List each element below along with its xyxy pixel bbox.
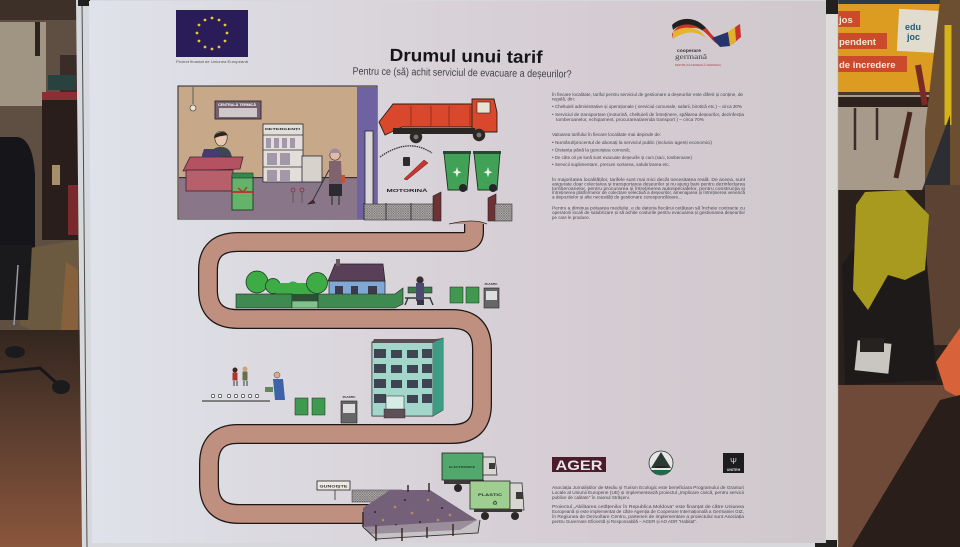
logo: triangle emblem [649,451,673,475]
icon: green truck electronics: ELECTRONICE [449,465,475,469]
background: right side of room: de incredere [839,60,896,71]
shelf with detergents: DETERGENȚI [265,127,300,131]
text block: conclusion: În majoritatea localităților, tarifele sunt mai mici decât necesitatea reală. De aceea, sunt [551,177,746,182]
text block: project credits: Proiectul „Abilitarea cetățenilor în Republica Moldova” este finanțat de către Uniunea [552,504,745,509]
text block: conclusion: asigurate doar colectarea și transportarea deșeurilor și nu ajung bani pentru dezinfectarea [552,182,746,186]
fence and gate [364,192,512,224]
text block: tariff value: Valoarea tarifului în fiecare localitate mai depinde de: [552,132,661,137]
icon: small bins with plastic container [450,282,499,308]
text block: tariff value: • De câte ori pe lună sunt evacuate deșeurile și cum (saci, tomberoane) [552,155,693,160]
icon: EU flag [176,10,248,64]
subtitle: Pentru ce (să) achit serviciul de evacuare a deșeurilor? [352,65,572,81]
text block: conclusion: Pentru a diminua poluarea mediului, e de datoria fiecărui cetățean să încheie contracte cu [552,206,746,210]
text block: conclusion: întreținerea platformelor de colectare selectivă a deșeurilor, amenajarea și întreținerea venerică [551,190,746,195]
text block: tariff value: • Numărul/procentul de abonați la serviciul public (inclusiv agenți economici) [552,140,713,145]
text block: conclusion: operatorii locali de salubrizare și să achite costurile pentru evacuarea și gestionarea deșeurilor [552,210,746,215]
flowers [291,188,304,203]
background: right side of room: joc [906,32,920,42]
illustration: office scene [178,86,377,219]
icon: fuel gauge: MOTORINĂ [386,187,429,193]
whiteboard frame [76,0,838,547]
logo: cooperare germana: REPUBLICA FEDERALĂ GERMANIA [675,63,721,67]
icon: green truck electronics [442,453,497,492]
logo: dark emblem: UNITEH [727,468,741,472]
illustration: apartment block [372,338,443,418]
icon: EU flag: Proiect finanțat de Uniunea Europeană [176,60,248,64]
background: right side of room: pendent [839,37,877,48]
sign: village name: GUNOIȘTE [320,484,348,488]
text block: project credits: pentru Guvernare Eficientă și Responsabilă – AGER și AO ADR “Habitat”. [552,519,697,524]
desk with clerk [183,131,243,191]
illustration: garbage truck [379,99,497,143]
text block: tariff composition: tomberoanelor, echipament, procurarea/arenda transport ) – circa 70% [556,117,704,122]
text block: conclusion: tomberoanelor, pentru procurarea și întreținerea autospecialelor, pentru construcția și [552,186,745,191]
icon: fuel gauge [380,146,432,193]
text block: project credits: Asociația Jurnaliștilor de Mediu și Turism Ecologic este beneficiara Programului de Granturi [552,485,744,490]
logo: cooperare germana [672,19,741,67]
text block: conclusion: pe care le produce. [552,215,590,220]
title: Drumul unui tarif [389,45,543,67]
shelf with detergents [263,124,303,182]
logo: dark emblem [723,453,744,473]
icon: light green truck plastic: ♻ [492,500,498,507]
text block: tariff composition: • Serviciul de transportare (motorină, cheltuieli de întreținere, spălarea deșeurilor, dezinfecția [552,112,745,117]
text block: tariff composition: regulă, din: [552,96,575,102]
logo: triangle emblem: HABITAT [655,465,667,469]
icon: light green truck plastic: PLASTIC [478,493,503,497]
icon: green gift bin [231,173,254,210]
icon: green bins [443,151,501,192]
background: right side of room: jos [838,15,853,26]
person on bench [405,276,433,305]
air conditioner: CENTRALĂ TERMICĂ [218,102,257,107]
text block: project credits: în Regiunea de Dezvoltare Centru, parteneri de implementare a proiectului sunt Asociația [551,514,745,519]
people gardening [202,366,285,401]
background: right side of room: edu [905,22,921,32]
logo: cooperare germana: cooperare [677,48,701,53]
illustration: house with garden [236,259,403,308]
woman sweeping [308,148,345,205]
text block: project credits [551,485,745,524]
text block: tariff composition: În fiecare localitate, tariful pentru serviciul de gestionare a deșeurilor este diferit și conține, de [551,92,744,97]
text block: tariff composition [551,92,745,122]
air conditioner [215,101,261,119]
icon: small bins with plastic container 2: PLASTIC [343,395,356,399]
icon: small bins with plastic container 2 [295,395,357,423]
logo: AGER: AGER [556,457,602,473]
logo: dark emblem: Ψ [730,457,737,466]
logo: cooperare germana: germană [675,52,708,61]
icon: small bins with plastic container: PLASTIC [485,282,498,286]
text block: tariff value [552,132,713,167]
icon: light bulb [190,87,196,111]
text block: conclusion [551,177,746,220]
panel: poster board [89,1,826,543]
illustration: landfill [352,483,480,541]
background: left side of room [0,0,84,547]
text block: tariff value: • Distanța până la gunoiștea comună; [552,148,630,152]
text block: conclusion: a depozitelor și alte necesități de gestionare corespunzătoare... [552,194,682,200]
text block: project credits: Europeană și este implementat de către Agenția de Cooperare Internațională a Germaniei GIZ, [552,509,744,514]
sign: village name [317,481,350,500]
text block: tariff composition: • Cheltuieli administrative și operaționale ( serviciul comunale, salarii, birotică etc.) – circa 30% [552,104,742,109]
icon: light green truck plastic [470,481,524,520]
background: right side of room [836,0,960,547]
text block: project credits: Locale al Uniunii Europene (UE) și implementează proiectul „Implicare civică, pentru servicii [552,490,744,495]
text block: tariff value: • Servicii suplimentare, precum sortarea, salubrizarea etc. [552,162,670,167]
text block: project credits: publice de calitate” în raionul Strășeni. [552,495,630,500]
road [208,224,482,514]
